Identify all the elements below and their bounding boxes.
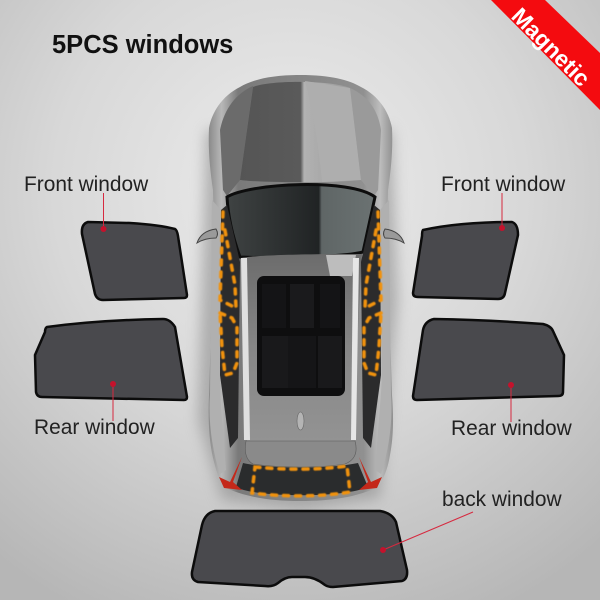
- right side glass: [361, 205, 381, 448]
- car body: [209, 75, 393, 501]
- label: rear left: [34, 381, 156, 439]
- left mirror: [197, 229, 218, 243]
- title: 5PCS windows: [52, 31, 233, 59]
- car top view: [197, 75, 404, 510]
- right tail light: [359, 457, 382, 490]
- rear glass: [236, 463, 368, 495]
- left rail: [241, 258, 250, 440]
- car shadow: [198, 130, 398, 510]
- window shade: rear right: [413, 319, 564, 400]
- right door strip: [375, 200, 392, 474]
- window shade: front right: [413, 222, 518, 299]
- label: rear left: Rear window: [34, 416, 156, 439]
- antenna: [297, 412, 304, 430]
- label: rear right: [451, 382, 573, 440]
- left tail light: [219, 457, 242, 490]
- right rail: [351, 258, 359, 440]
- label: back window: [380, 488, 563, 553]
- left fender: [220, 86, 253, 196]
- label: front right: [441, 173, 566, 231]
- label: front right: Front window: [441, 173, 566, 196]
- roof: [241, 254, 362, 441]
- left side glass: [220, 205, 240, 448]
- trunk lid: [245, 441, 356, 467]
- label: back window: back window: [442, 488, 563, 511]
- corner ribbon: Magnetic: Magnetic: [507, 3, 596, 92]
- hood highlight: [305, 81, 361, 182]
- hood: [240, 82, 361, 182]
- left door strip: [209, 200, 226, 474]
- orange magnet strips: [220, 212, 381, 496]
- roof highlight: [326, 255, 356, 276]
- label: front left: [24, 173, 149, 232]
- window shade: front left: [82, 222, 187, 300]
- label: front left: Front window: [24, 173, 149, 196]
- window shade: rear left: [35, 319, 187, 400]
- corner ribbon: Magnetic: [491, 0, 600, 110]
- right mirror: [384, 229, 404, 243]
- windshield: [227, 185, 375, 257]
- window shade: back: [192, 511, 407, 587]
- right fender: [350, 88, 381, 196]
- sunroof: [257, 276, 345, 396]
- label: rear right: Rear window: [451, 417, 573, 440]
